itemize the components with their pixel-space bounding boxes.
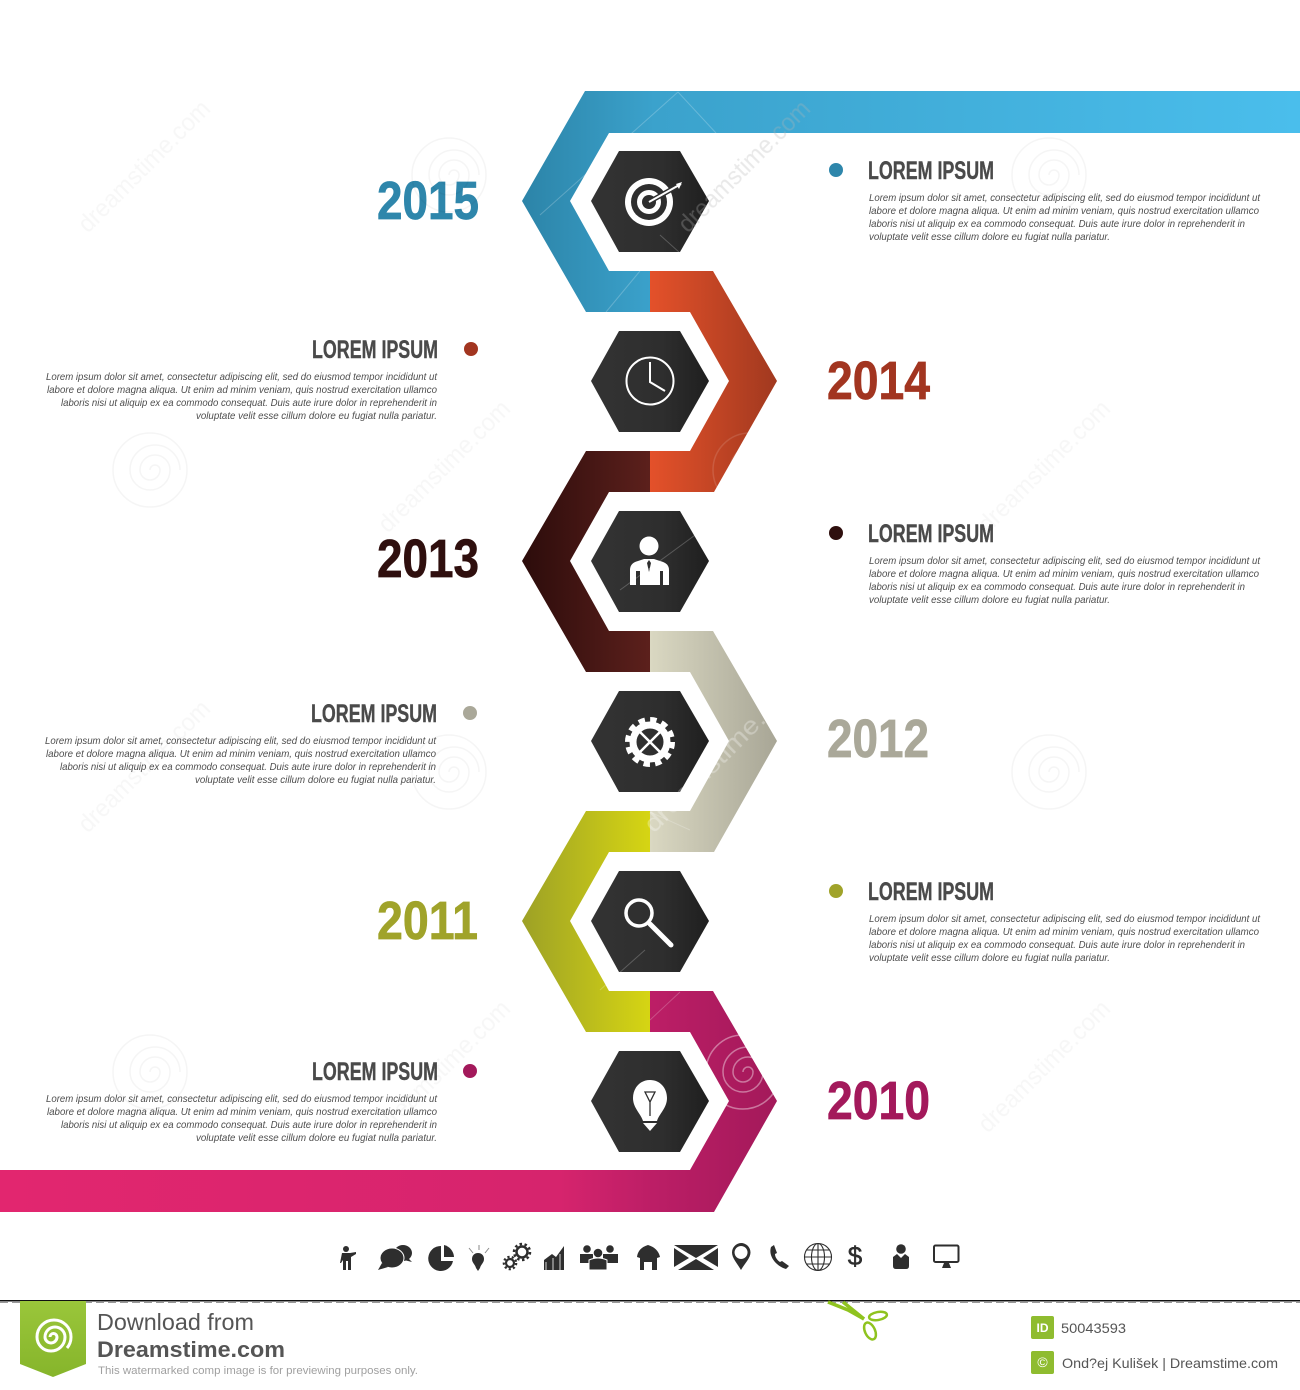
image credit: © [1037, 1354, 1048, 1370]
icon: bulb with rays [469, 1245, 489, 1271]
text block: 2012: Lorem ipsum dolor sit amet, consectetur adipiscing elit, sed do eiusmod tempor incididunt ut [45, 735, 437, 747]
text block: 2011: voluptate velit esse cillum dolore eu fugiat nulla pariatur. [869, 952, 1110, 964]
footer cut line [0, 1300, 1300, 1302]
watermark overlay [72, 92, 1116, 1138]
hexagon icon: gear [591, 691, 709, 792]
icon: telephone [770, 1245, 789, 1269]
ribbon: 2013 dark brown [522, 451, 650, 672]
image credit [1031, 1351, 1278, 1374]
text block: 2015: Lorem ipsum dolor sit amet, consectetur adipiscing elit, sed do eiusmod tempor incididunt ut [869, 192, 1261, 204]
text block: 2015: labore et dolore magna aliqua. Ut enim ad minim veniam, quis nostrud exercitation ullamco [869, 205, 1259, 217]
watermark overlay: dreamstime.com [972, 995, 1116, 1138]
watermark overlay: dreamstime.com [72, 95, 216, 238]
hexagon icon: magnifier [591, 871, 709, 972]
text block: 2010: Lorem ipsum dolor sit amet, consectetur adipiscing elit, sed do eiusmod tempor incididunt ut [46, 1093, 438, 1105]
watermark overlay: dreamstime.com [372, 395, 516, 538]
text block: 2015: laboris nisi ut aliquip ex ea commodo consequat. Duis aute irure dolor in reprehenderit in [869, 218, 1245, 230]
icon: growth chart [544, 1246, 564, 1270]
footer text: download from dreamstime: Dreamstime.com [97, 1337, 285, 1362]
text block: 2013 [829, 520, 1261, 606]
text block: 2014: labore et dolore magna aliqua. Ut enim ad minim veniam, quis nostrud exercitation ullamco [47, 384, 437, 396]
icon row [340, 1241, 958, 1271]
text block: 2011: LOREM IPSUM [868, 878, 994, 906]
text block: 2012 [45, 700, 477, 786]
text block: 2012: labore et dolore magna aliqua. Ut enim ad minim veniam, quis nostrud exercitation ullamco [46, 748, 436, 760]
text block: 2013: laboris nisi ut aliquip ex ea commodo consequat. Duis aute irure dolor in reprehenderit in [869, 581, 1245, 593]
icon: scissors [828, 1302, 888, 1341]
text block: 2015: voluptate velit esse cillum dolore eu fugiat nulla pariatur. [869, 231, 1110, 243]
ribbon: 2010 magenta [0, 991, 777, 1212]
text block: 2012: LOREM IPSUM [311, 700, 437, 728]
hexagon icon: light bulb [591, 1051, 709, 1152]
text block: 2015 [829, 157, 1261, 243]
text block: 2011: Lorem ipsum dolor sit amet, consectetur adipiscing elit, sed do eiusmod tempor incididunt ut [869, 913, 1261, 925]
icon: home [637, 1245, 660, 1270]
text block: 2013: Lorem ipsum dolor sit amet, consectetur adipiscing elit, sed do eiusmod tempor incididunt ut [869, 555, 1261, 567]
text block: 2010: laboris nisi ut aliquip ex ea commodo consequat. Duis aute irure dolor in reprehenderit in [61, 1119, 437, 1131]
text block: 2011 [829, 878, 1261, 964]
footer text: download from dreamstime: Download from [97, 1309, 254, 1335]
year 2011: 2011 [377, 891, 478, 951]
text block: 2010: voluptate velit esse cillum dolore eu fugiat nulla pariatur. [196, 1132, 437, 1144]
icon: people group [580, 1245, 618, 1270]
footer badge: green ribbon with spiral [20, 1301, 86, 1377]
footer text: download from dreamstime: This watermarked comp image is for previewing purposes only. [98, 1365, 418, 1377]
icon: presenter [340, 1246, 356, 1270]
icon: map pin [732, 1243, 750, 1270]
hexagon icon: target [591, 151, 709, 252]
text block: 2012: voluptate velit esse cillum dolore eu fugiat nulla pariatur. [195, 774, 436, 786]
footer text: download from dreamstime [97, 1309, 418, 1377]
hexagon icon: clock [591, 331, 709, 432]
icon: user [893, 1244, 909, 1269]
year 2010: 2010 [827, 1071, 930, 1131]
watermark overlay: dreamstime.com [72, 695, 216, 838]
watermark overlay: dreamstime.com [638, 666, 810, 838]
image credit: Ond?ej Kulišek | Dreamstime.com [1062, 1355, 1278, 1371]
text block: 2014: Lorem ipsum dolor sit amet, consectetur adipiscing elit, sed do eiusmod tempor incididunt ut [46, 371, 438, 383]
watermark overlay: dreamstime.com [372, 995, 516, 1138]
text block: 2014 [46, 336, 478, 422]
icon: gears [504, 1244, 530, 1269]
year 2015: 2015 [377, 171, 479, 231]
text block: 2011: labore et dolore magna aliqua. Ut enim ad minim veniam, quis nostrud exercitation ullamco [869, 926, 1259, 938]
ribbon: 2012 beige [650, 631, 777, 852]
hexagon icon: businessman [591, 511, 709, 612]
icon: envelope [674, 1245, 718, 1270]
text block: 2010: labore et dolore magna aliqua. Ut enim ad minim veniam, quis nostrud exercitation ullamco [47, 1106, 437, 1118]
text block: 2013: labore et dolore magna aliqua. Ut enim ad minim veniam, quis nostrud exercitation ullamco [869, 568, 1259, 580]
watermark overlay: dreamstime.com [672, 95, 816, 238]
text block: 2011: laboris nisi ut aliquip ex ea commodo consequat. Duis aute irure dolor in reprehenderit in [869, 939, 1245, 951]
icon: speech bubbles [378, 1245, 412, 1270]
text block: 2010 [46, 1058, 477, 1144]
text block: 2013: LOREM IPSUM [868, 520, 994, 548]
watermark overlay: dreamstime.com [972, 395, 1116, 538]
image id: 50043593 [1061, 1320, 1126, 1336]
ribbon: 2011 olive [522, 811, 650, 1032]
icon: monitor [934, 1246, 958, 1268]
text block: 2014: LOREM IPSUM [312, 336, 438, 364]
icon: pie chart [428, 1245, 454, 1271]
year 2013: 2013 [377, 529, 479, 589]
text block: 2013: voluptate velit esse cillum dolore eu fugiat nulla pariatur. [869, 594, 1110, 606]
icon: dollar: $ [848, 1241, 863, 1271]
text block: 2014: voluptate velit esse cillum dolore eu fugiat nulla pariatur. [196, 410, 437, 422]
ribbon: 2015 blue [522, 91, 1300, 312]
year 2012: 2012 [827, 709, 929, 769]
text block: 2014: laboris nisi ut aliquip ex ea commodo consequat. Duis aute irure dolor in reprehenderit in [61, 397, 437, 409]
text block: 2015: LOREM IPSUM [868, 157, 994, 185]
text block: 2012: laboris nisi ut aliquip ex ea commodo consequat. Duis aute irure dolor in reprehenderit in [60, 761, 436, 773]
ribbon: 2014 orange [650, 271, 777, 492]
text block: 2010: LOREM IPSUM [312, 1058, 438, 1086]
year 2014: 2014 [827, 351, 930, 411]
image id [1031, 1316, 1126, 1339]
image id: ID [1036, 1321, 1049, 1335]
icon: globe [804, 1244, 832, 1270]
